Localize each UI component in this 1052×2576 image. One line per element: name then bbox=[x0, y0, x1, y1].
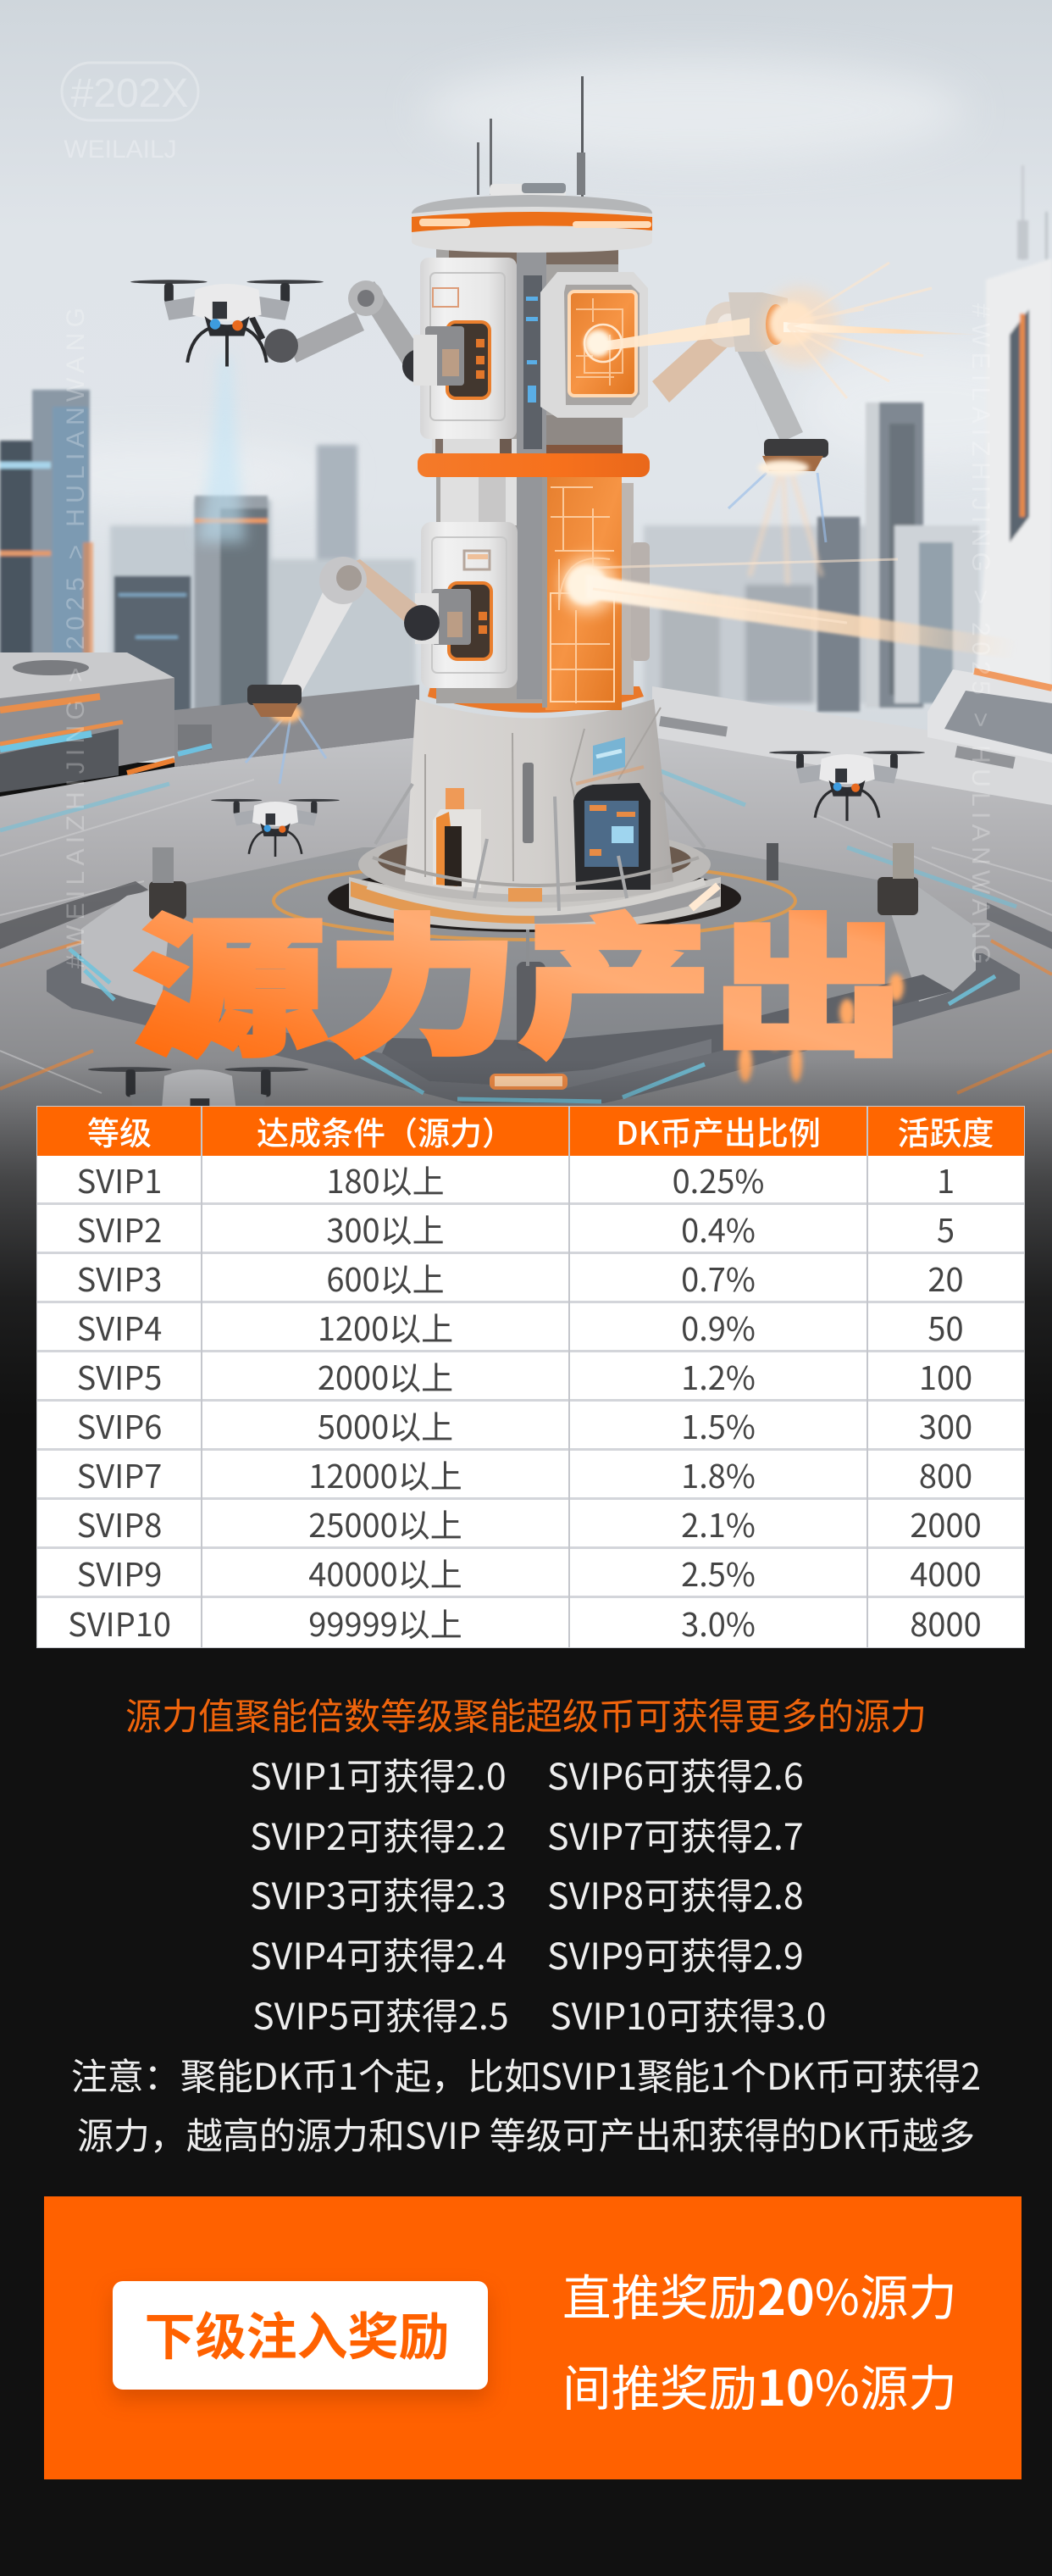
table header row: 达成条件（源力） bbox=[257, 1108, 514, 1154]
row SVIP7 bbox=[37, 1451, 1024, 1500]
platform front skirt bbox=[382, 974, 953, 1089]
background wall right bbox=[652, 686, 1052, 809]
platform rim bbox=[47, 953, 1020, 1103]
row SVIP6: SVIP6 bbox=[77, 1402, 162, 1448]
row SVIP6: 1.5% bbox=[681, 1402, 756, 1448]
tower orange ring bbox=[418, 453, 650, 477]
door bbox=[433, 809, 481, 888]
tower base body bbox=[368, 686, 705, 912]
row SVIP9: SVIP9 bbox=[77, 1549, 162, 1596]
watermark: #202X badge: #202X bbox=[71, 71, 188, 116]
row SVIP1: SVIP1 bbox=[77, 1156, 162, 1202]
row SVIP5 bbox=[37, 1352, 1024, 1402]
row SVIP6: 300 bbox=[919, 1402, 972, 1448]
row SVIP6 bbox=[37, 1402, 1024, 1451]
row SVIP10 bbox=[68, 1599, 982, 1646]
multiplier list bbox=[250, 1748, 827, 2040]
row SVIP5: 100 bbox=[919, 1352, 972, 1399]
row SVIP1: 180以上 bbox=[326, 1156, 445, 1202]
row SVIP7: SVIP7 bbox=[77, 1451, 162, 1497]
reward text: direct: 直推奖励20%源力 bbox=[562, 2258, 957, 2329]
platform hole bbox=[328, 864, 741, 932]
note text bbox=[71, 2048, 981, 2160]
row SVIP5: SVIP5 bbox=[77, 1352, 162, 1399]
background wall left bbox=[174, 685, 419, 767]
row SVIP3: 600以上 bbox=[326, 1254, 445, 1301]
row SVIP2: 5 bbox=[937, 1205, 955, 1252]
tower top cap with antennas bbox=[412, 76, 652, 253]
multiplier list: SVIP8可获得2.8 bbox=[547, 1868, 804, 1920]
dark fade into page background bbox=[0, 1059, 1052, 1457]
vertical watermark, left: #WEILAIZHIJING > 2025 > HULIANWANG bbox=[62, 308, 90, 969]
multiplier list: SVIP6可获得2.6 bbox=[547, 1748, 804, 1801]
row SVIP4 bbox=[37, 1303, 1024, 1352]
gripper sparks and drone jet bbox=[197, 356, 826, 784]
row SVIP8: 2000 bbox=[910, 1500, 982, 1546]
platform post left bbox=[149, 881, 186, 919]
table header row bbox=[37, 1107, 1024, 1156]
upper arm, right side bbox=[652, 292, 828, 471]
row SVIP4: 50 bbox=[927, 1303, 964, 1350]
table header row: DK币产出比例 bbox=[616, 1108, 821, 1154]
row SVIP5: 2000以上 bbox=[318, 1352, 453, 1399]
row SVIP1 bbox=[37, 1156, 1024, 1205]
lower-left arm bbox=[247, 557, 440, 717]
watermark: #202X badge bbox=[62, 63, 198, 164]
control panel bbox=[573, 783, 651, 890]
platform orange ring bbox=[274, 862, 795, 940]
title: 源力产出: 源力产出 bbox=[133, 867, 905, 1085]
row SVIP8: 2.1% bbox=[681, 1500, 756, 1546]
row SVIP2: 0.4% bbox=[681, 1205, 756, 1252]
tower upper-right octagonal module bbox=[540, 272, 648, 418]
row SVIP2 bbox=[37, 1205, 1024, 1254]
multiplier list: SVIP1可获得2.0 bbox=[250, 1748, 507, 1801]
reward text: indirect: 间推奖励10%源力 bbox=[562, 2349, 957, 2420]
heading: orange subtitle: 源力值聚能倍数等级聚能超级币可获得更多的源力 bbox=[125, 1688, 927, 1740]
row SVIP4: 0.9% bbox=[681, 1303, 756, 1350]
drone: bottom left bbox=[88, 1067, 308, 1116]
row SVIP3: 20 bbox=[927, 1254, 964, 1301]
note text: 源力，越高的源力和SVIP 等级可产出和获得的DK币越多 bbox=[77, 2107, 975, 2160]
hero illustration: robotic tower in futuristic city bbox=[0, 0, 1052, 1344]
clouds bbox=[0, 59, 1052, 508]
row SVIP2: 300以上 bbox=[326, 1205, 445, 1252]
row SVIP4: 1200以上 bbox=[318, 1303, 453, 1350]
table header row: 等级 bbox=[87, 1108, 152, 1154]
platform shoulders bbox=[81, 886, 174, 1007]
row SVIP8: SVIP8 bbox=[77, 1500, 162, 1546]
left machinery block bbox=[0, 652, 212, 792]
row SVIP1: 0.25% bbox=[673, 1156, 764, 1202]
sky background bbox=[0, 0, 1052, 763]
row SVIP5: 1.2% bbox=[681, 1352, 756, 1399]
row SVIP6: 5000以上 bbox=[318, 1402, 453, 1448]
multiplier list: SVIP7可获得2.7 bbox=[547, 1808, 804, 1861]
multiplier list: SVIP5可获得2.5 bbox=[252, 1988, 509, 2040]
row SVIP7: 800 bbox=[919, 1451, 972, 1497]
platform lamp bbox=[490, 1074, 568, 1090]
drone: floor right bbox=[769, 751, 925, 821]
distant city skyline bbox=[110, 445, 872, 716]
row SVIP4: SVIP4 bbox=[77, 1303, 162, 1350]
right rooftop block bbox=[927, 669, 1052, 763]
row SVIP10: 99999以上 bbox=[308, 1599, 462, 1646]
row SVIP10: SVIP10 bbox=[68, 1599, 171, 1646]
multiplier list: SVIP9可获得2.9 bbox=[547, 1928, 804, 1980]
row SVIP8: 25000以上 bbox=[308, 1500, 462, 1546]
tower base skirt bbox=[349, 826, 721, 930]
multiplier list: SVIP3可获得2.3 bbox=[250, 1868, 507, 1920]
table header row: 活跃度 bbox=[897, 1108, 994, 1154]
floor bbox=[0, 737, 1052, 1457]
row SVIP10: 3.0% bbox=[681, 1599, 756, 1646]
row SVIP9: 40000以上 bbox=[308, 1549, 462, 1596]
watermark: #202X badge: WEILAILJ bbox=[64, 136, 177, 164]
laser beam upper bbox=[584, 263, 983, 398]
table: SVIP levels bbox=[37, 1107, 1024, 1647]
platform post right bbox=[878, 877, 918, 915]
central platform bbox=[47, 843, 1020, 1103]
platform dome bbox=[81, 847, 976, 1089]
row SVIP8 bbox=[37, 1500, 1024, 1549]
row SVIP9 bbox=[37, 1549, 1024, 1598]
drone: floor left bbox=[211, 799, 340, 857]
row SVIP3: SVIP3 bbox=[77, 1254, 162, 1301]
multiplier list: SVIP2可获得2.2 bbox=[250, 1808, 507, 1861]
tower lower orange circuit panel bbox=[542, 477, 622, 710]
row SVIP9: 2.5% bbox=[681, 1549, 756, 1596]
row SVIP7: 12000以上 bbox=[308, 1451, 462, 1497]
multiplier list: SVIP4可获得2.4 bbox=[250, 1928, 507, 1980]
note text: 注意：聚能DK币1个起，比如SVIP1聚能1个DK币可获得2 bbox=[71, 2048, 981, 2101]
multiplier list: SVIP10可获得3.0 bbox=[550, 1988, 827, 2040]
upper arm, left side bbox=[251, 280, 436, 383]
left city buildings bbox=[0, 390, 268, 720]
row SVIP3: 0.7% bbox=[681, 1254, 756, 1301]
tower upper-left white module bbox=[413, 258, 517, 439]
button: 下级注入奖励: 下级注入奖励 bbox=[144, 2296, 449, 2370]
row SVIP10: 8000 bbox=[910, 1599, 982, 1646]
right city buildings bbox=[817, 165, 1052, 712]
railing bbox=[368, 881, 705, 912]
row SVIP2: SVIP2 bbox=[77, 1205, 162, 1252]
row SVIP1: 1 bbox=[937, 1156, 955, 1202]
panel: referral reward bbox=[44, 2196, 1022, 2479]
laser beam lower bbox=[566, 559, 1016, 659]
row SVIP7: 1.8% bbox=[681, 1451, 756, 1497]
row SVIP9: 4000 bbox=[910, 1549, 982, 1596]
drone: flying, top left bbox=[130, 280, 324, 366]
tower lower-left white module bbox=[415, 522, 518, 688]
vertical watermark, right: #WEILAIZHIJING > 2025 > HULIANWANG bbox=[966, 303, 994, 964]
row SVIP3 bbox=[37, 1254, 1024, 1303]
button: 下级注入奖励 bbox=[113, 2281, 488, 2390]
tower upper column bbox=[432, 246, 650, 703]
